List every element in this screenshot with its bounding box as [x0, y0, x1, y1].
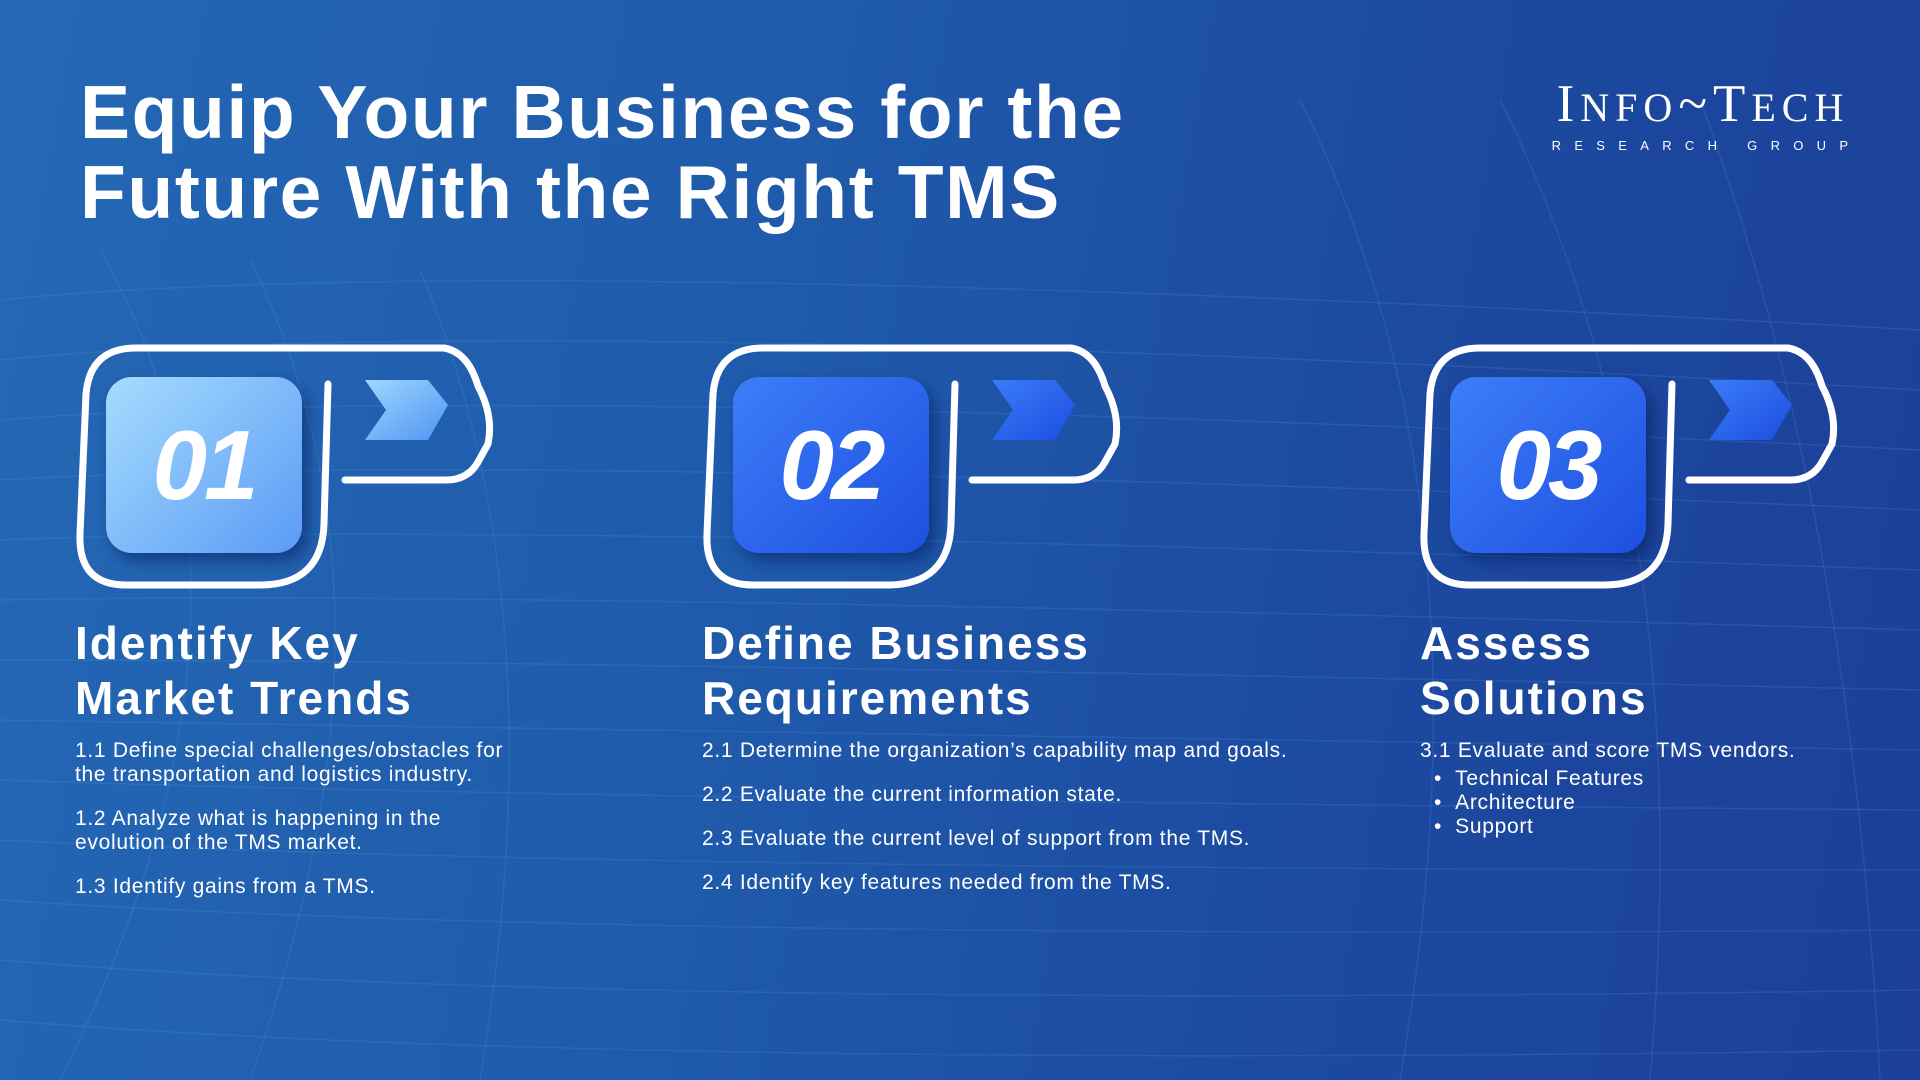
text 3: 3.1 Evaluate and score TMS vendors. [1420, 739, 1795, 762]
heading 3: Solutions [1420, 672, 1648, 724]
text 1: 1.2 Analyze what is happening in the [75, 807, 441, 830]
heading 1: Identify Key [75, 617, 360, 669]
badge 01: 01 [152, 410, 256, 520]
badge 03 [1420, 344, 1838, 588]
text 2 [702, 739, 1287, 894]
text 1: 1.1 Define special challenges/obstacles for [75, 739, 503, 762]
text 2: 2.2 Evaluate the current information state. [702, 783, 1122, 806]
title: Future With the Right TMS [80, 150, 1061, 234]
title [80, 70, 1125, 234]
logo: RESEARCH GROUP [1552, 138, 1861, 153]
heading 2: Define Business [702, 617, 1090, 669]
badge 02: 02 [779, 410, 882, 520]
heading 1: Market Trends [75, 672, 413, 724]
heading 1 [75, 617, 413, 724]
heading 2: Requirements [702, 672, 1033, 724]
text 1 [75, 739, 503, 898]
badge 03: 03 [1496, 410, 1600, 520]
text 3: • Support [1434, 815, 1534, 838]
text 3: • Technical Features [1434, 767, 1644, 790]
chevron [1709, 380, 1792, 440]
badge 01 [76, 344, 494, 588]
logo: INFO~TECH [1557, 75, 1849, 133]
badge 02 [703, 344, 1120, 588]
title: Equip Your Business for the [80, 70, 1125, 154]
heading 3: Assess [1420, 617, 1593, 669]
chevron [992, 380, 1075, 440]
text 1: 1.3 Identify gains from a TMS. [75, 875, 376, 898]
text 2: 2.4 Identify key features needed from the TMS. [702, 871, 1172, 894]
text 3: • Architecture [1434, 791, 1576, 814]
text 2: 2.1 Determine the organization’s capability map and goals. [702, 739, 1287, 762]
text 2: 2.3 Evaluate the current level of support from the TMS. [702, 827, 1250, 850]
heading 2 [702, 617, 1090, 724]
heading 3 [1420, 617, 1648, 724]
text 1: evolution of the TMS market. [75, 831, 363, 854]
text 3 [1420, 739, 1795, 838]
text 1: the transportation and logistics industry. [75, 763, 473, 786]
chevron [365, 380, 448, 440]
